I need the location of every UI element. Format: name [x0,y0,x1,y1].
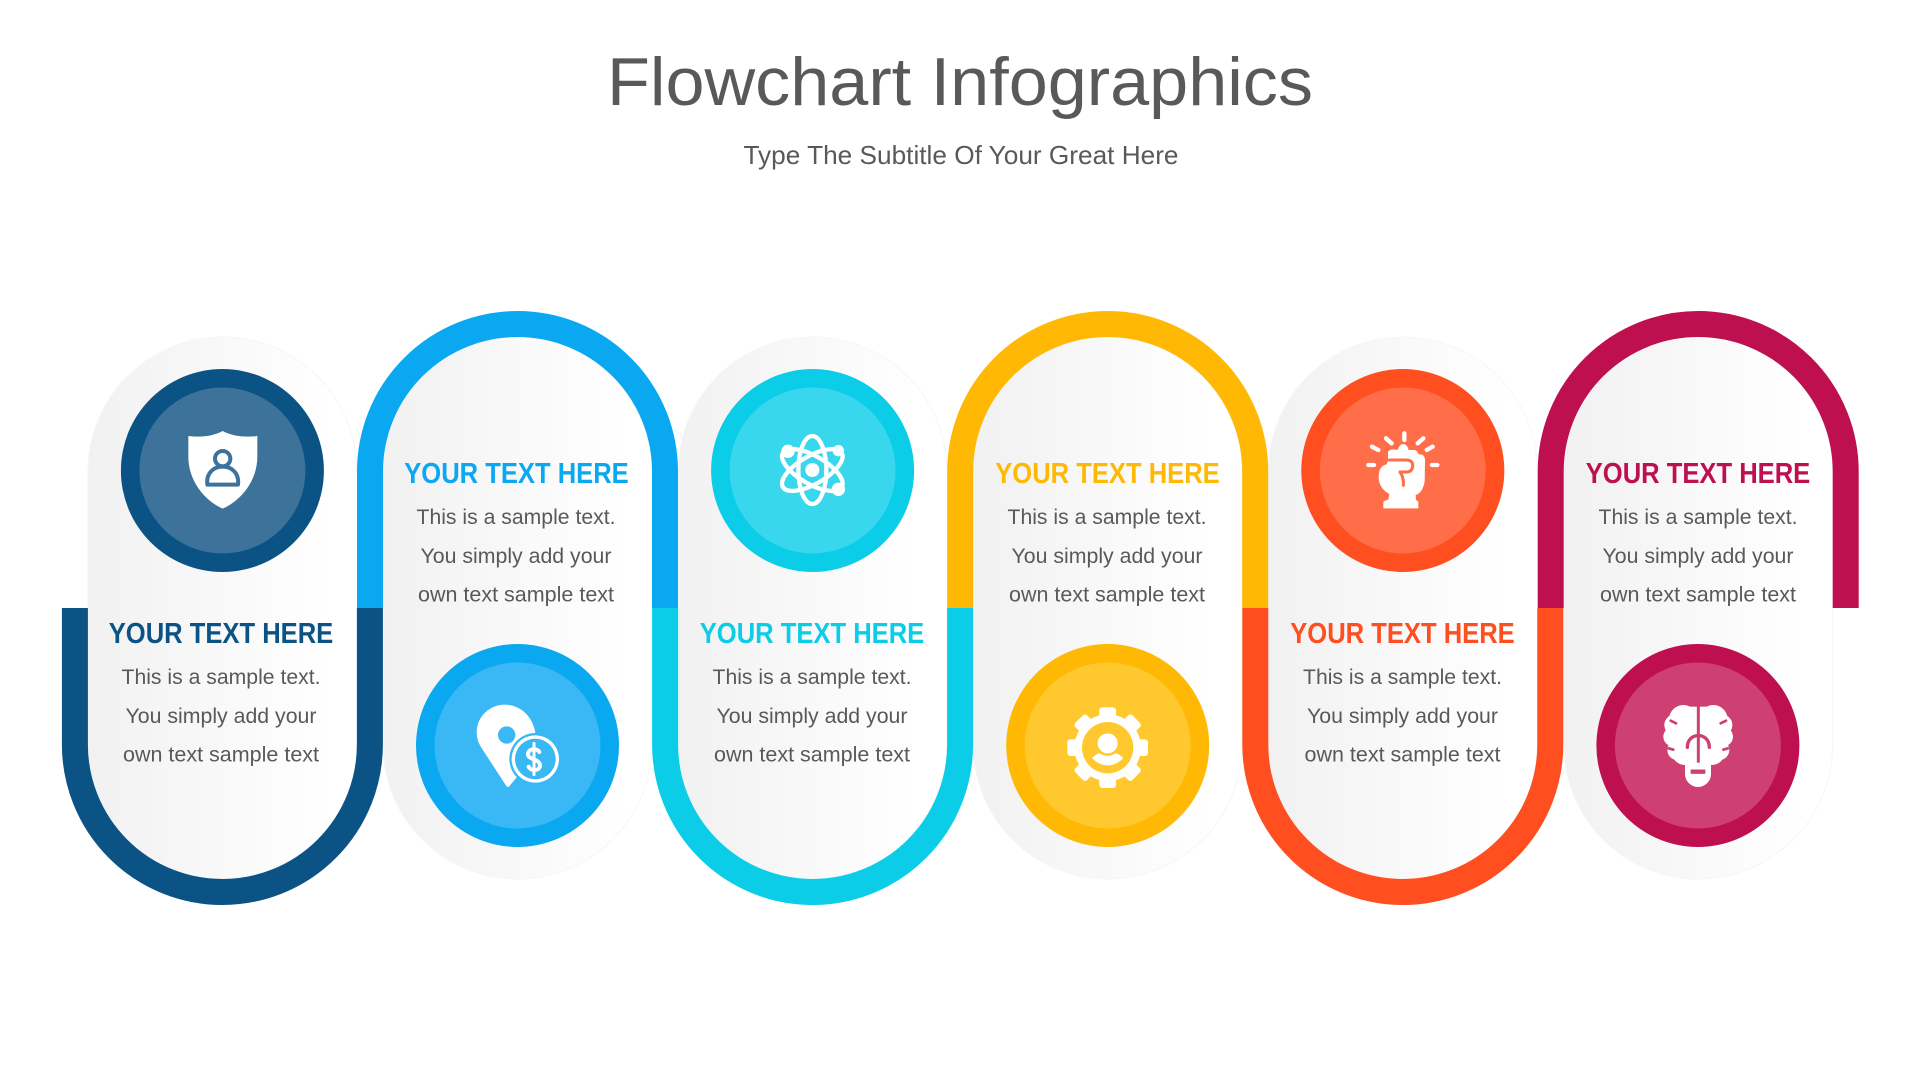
text: step 3: own text sample text [714,744,910,766]
text: step 5: YOUR TEXT HERE [1290,618,1515,650]
text: step 1: This is a sample text. [122,666,320,689]
panel: step 1 [88,337,357,879]
band: step 4 amber arch [960,324,1255,608]
text: step 4: own text sample text [1009,584,1205,606]
text: step 2: You simply add your [420,545,612,568]
text: step 1: You simply add your [126,705,316,728]
text: step 6: This is a sample text. [1598,506,1798,529]
icon: brain lightbulb in crimson circle [1596,644,1799,847]
title: Flowchart Infographics [607,44,1313,120]
text: step 2: This is a sample text. [416,506,616,529]
band: step 6 crimson arch [1551,324,1846,608]
text: step 3: This is a sample text. [712,666,912,689]
text: step 2 [404,458,629,606]
text: step 6: YOUR TEXT HERE [1586,458,1810,490]
text: step 4: You simply add your [1012,545,1202,568]
icon: shield with person in navy circle [121,369,324,572]
text: step 5: This is a sample text. [1303,666,1502,689]
subtitle: Type The Subtitle Of Your Great Here [744,140,1178,170]
panel: step 4 [973,337,1242,879]
text: step 3 [700,618,924,766]
icon: atom in cyan circle [711,369,914,572]
panel: step 2 [383,337,652,879]
text: step 3: YOUR TEXT HERE [700,618,924,650]
icon: gear with person in amber circle [1006,644,1209,847]
text: step 2: YOUR TEXT HERE [404,458,629,490]
band: step 5 orange U [1255,608,1550,892]
panel: step 5 [1268,337,1537,879]
band: step 1 navy U [75,608,370,892]
text: step 5: You simply add your [1307,705,1498,728]
text: step 1 [109,618,333,766]
text: step 6: own text sample text [1600,584,1796,606]
band: step 3 cyan U [665,608,960,892]
text: step 3: You simply add your [716,705,908,728]
text: step 4: YOUR TEXT HERE [995,458,1220,490]
text: step 5: own text sample text [1304,744,1501,766]
text: step 2: own text sample text [418,584,614,606]
text: step 6: You simply add your [1602,545,1794,568]
text: step 1: own text sample text [123,744,319,766]
panel: step 6 [1564,337,1833,879]
text: step 5 [1290,618,1515,766]
text: step 1: YOUR TEXT HERE [109,618,333,650]
text: step 6 [1586,458,1810,606]
text: step 4: This is a sample text. [1008,506,1206,529]
icon: map pin with dollar coin in blue circle [416,644,619,847]
panel: step 3 [678,337,947,879]
band: step 2 blue arch [370,324,665,608]
text: step 4 [995,458,1220,606]
icon: raised fist in orange circle [1301,369,1504,572]
